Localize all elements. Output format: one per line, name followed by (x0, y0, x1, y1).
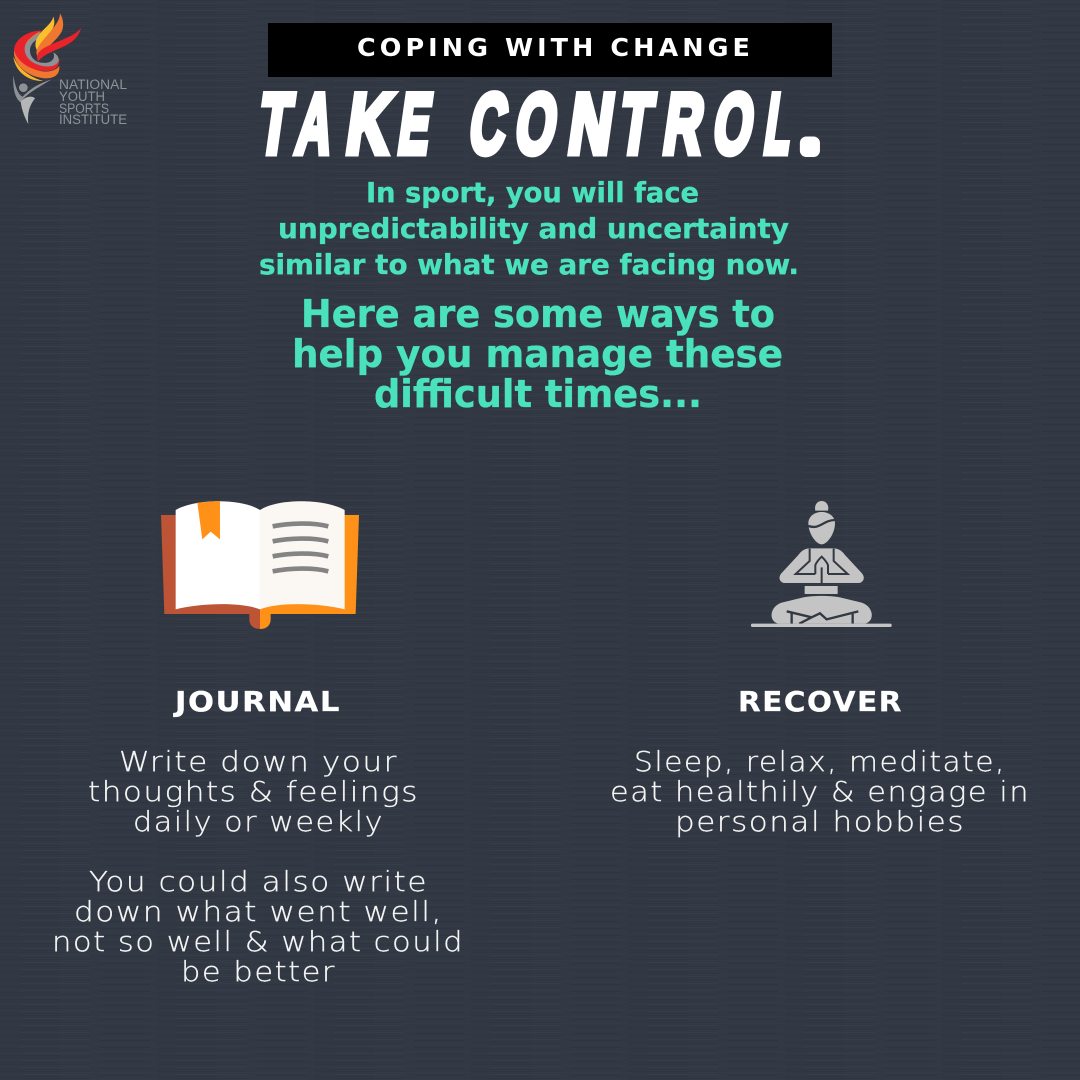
text: journal advice (52, 745, 464, 988)
text: journal advice: not so well & what could (52, 925, 464, 958)
text: journal advice: be better (181, 955, 336, 988)
text: journal advice: thoughts & feelings (88, 775, 419, 808)
title: Take Control: O (510, 76, 563, 171)
banner: Coping with Change: COPING WITH CHANGE (357, 33, 754, 62)
icon: meditating figure (751, 501, 892, 627)
logo: National Youth Sports Institute: NATIONAL (59, 77, 127, 92)
banner: Coping with Change (268, 23, 832, 77)
logo: National Youth Sports Institute (13, 13, 127, 127)
logo: National Youth Sports Institute: SPORTS (59, 101, 109, 116)
icon: open book (161, 501, 359, 629)
title: Take Control (253, 76, 817, 172)
text: journal advice: Write down your (119, 745, 398, 778)
title: Take Control: N (563, 76, 620, 171)
heading: Journal: JOURNAL (173, 685, 341, 718)
intro text: unpredictability and uncertainty (278, 212, 789, 245)
lead-in text (292, 292, 783, 416)
text: journal advice: You could also write (89, 865, 428, 898)
text: recover advice: personal hobbies (675, 805, 965, 838)
text: journal advice: daily or weekly (133, 805, 384, 838)
logo: National Youth Sports Institute: YOUTH (59, 89, 105, 104)
heading: Recover: RECOVER (738, 685, 903, 718)
intro text (259, 176, 799, 281)
title: Take Control: E (393, 76, 437, 172)
title: Take Control: K (341, 76, 398, 171)
title: Take Control: R (658, 78, 710, 172)
lead-in text: help you manage these (292, 332, 783, 376)
text: recover advice: eat healthily & engage in (610, 775, 1030, 808)
intro text: similar to what we are facing now. (259, 248, 799, 281)
text: recover advice (610, 745, 1030, 838)
logo: National Youth Sports Institute: INSTITUTE (59, 112, 127, 127)
title: Take Control: C (464, 76, 513, 171)
lead-in text: difficult times... (374, 372, 702, 416)
title: Take Control: L (759, 78, 799, 172)
text: recover advice: Sleep, relax, meditate, (634, 745, 1006, 778)
title: Take Control: T (614, 76, 659, 171)
intro text: In sport, you will face (366, 176, 699, 209)
title: Take Control: A (291, 76, 339, 171)
title: Take Control: . (803, 106, 817, 162)
title: Take Control: O (708, 76, 760, 171)
title: Take Control: T (253, 76, 298, 171)
lead-in text: Here are some ways to (301, 292, 775, 336)
text: journal advice: down what went well, (74, 895, 443, 928)
